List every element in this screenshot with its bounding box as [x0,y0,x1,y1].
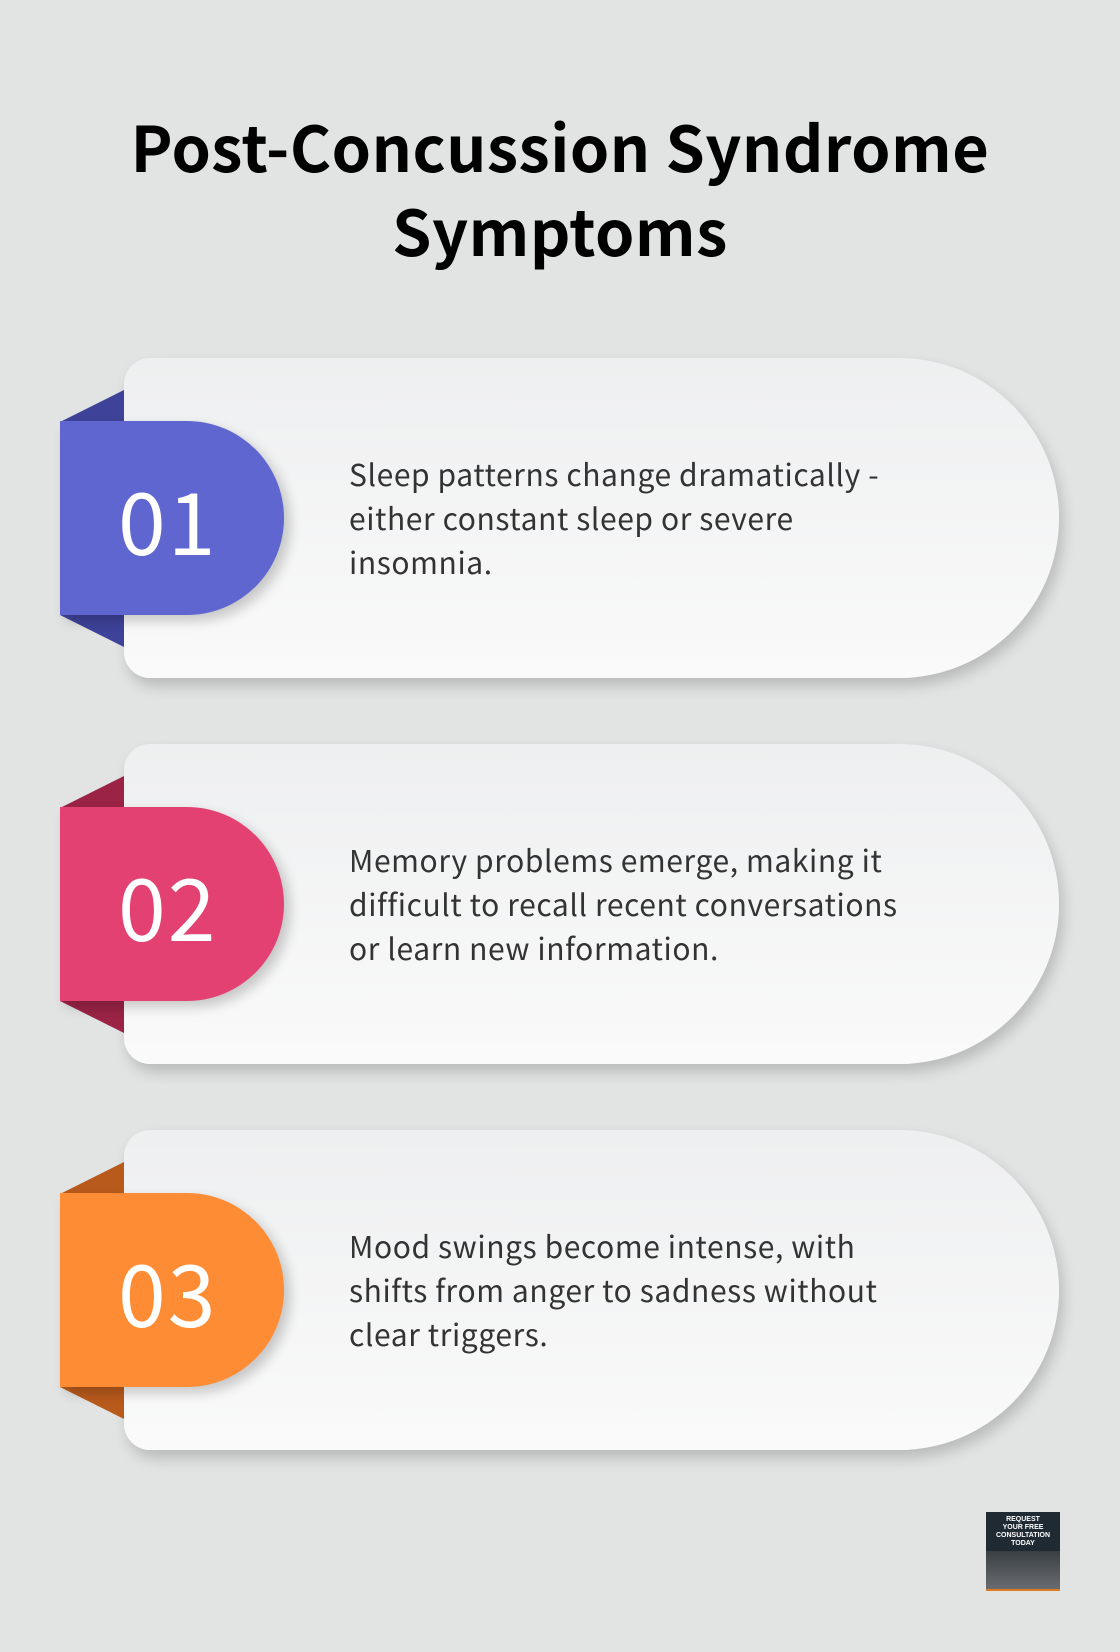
panel: item 03 [60,1130,1068,1464]
fold bottom 02 [60,1001,124,1033]
badge 03 [60,1193,284,1387]
card 03 [124,1130,1059,1450]
text 03: Mood swings become intense, with shifts from anger to sadness without clear triggers. [349,1223,878,1355]
text 01: Sleep patterns change dramatically - either constant sleep or severe insomnia. [349,451,879,583]
logo: CONSULTATION [996,1532,1050,1539]
card 01 [124,358,1059,678]
card 02 [124,744,1059,1064]
title: Post-Concussion Syndrome [131,100,989,191]
title [131,100,989,275]
fold bottom 03 [60,1387,124,1419]
title: Symptoms [392,184,728,275]
badge 03: 03 [118,1227,217,1352]
text 02: Memory problems emerge, making it difficult to recall recent conversations or learn new information. [349,837,898,969]
badge 02: 02 [118,841,217,966]
logo [986,1512,1060,1591]
fold bottom 01 [60,615,124,647]
badge 02 [60,807,284,1001]
fold top 03 [62,1162,124,1193]
logo: YOUR FREE [1003,1524,1043,1531]
badge 01: 01 [118,455,217,580]
badge 01 [60,421,284,615]
logo: REQUEST [1006,1516,1040,1523]
fold top 01 [62,390,124,421]
panel: item 01 [60,358,1068,692]
panel: item 02 [60,744,1068,1078]
fold top 02 [62,776,124,807]
logo: TODAY [1011,1540,1035,1547]
